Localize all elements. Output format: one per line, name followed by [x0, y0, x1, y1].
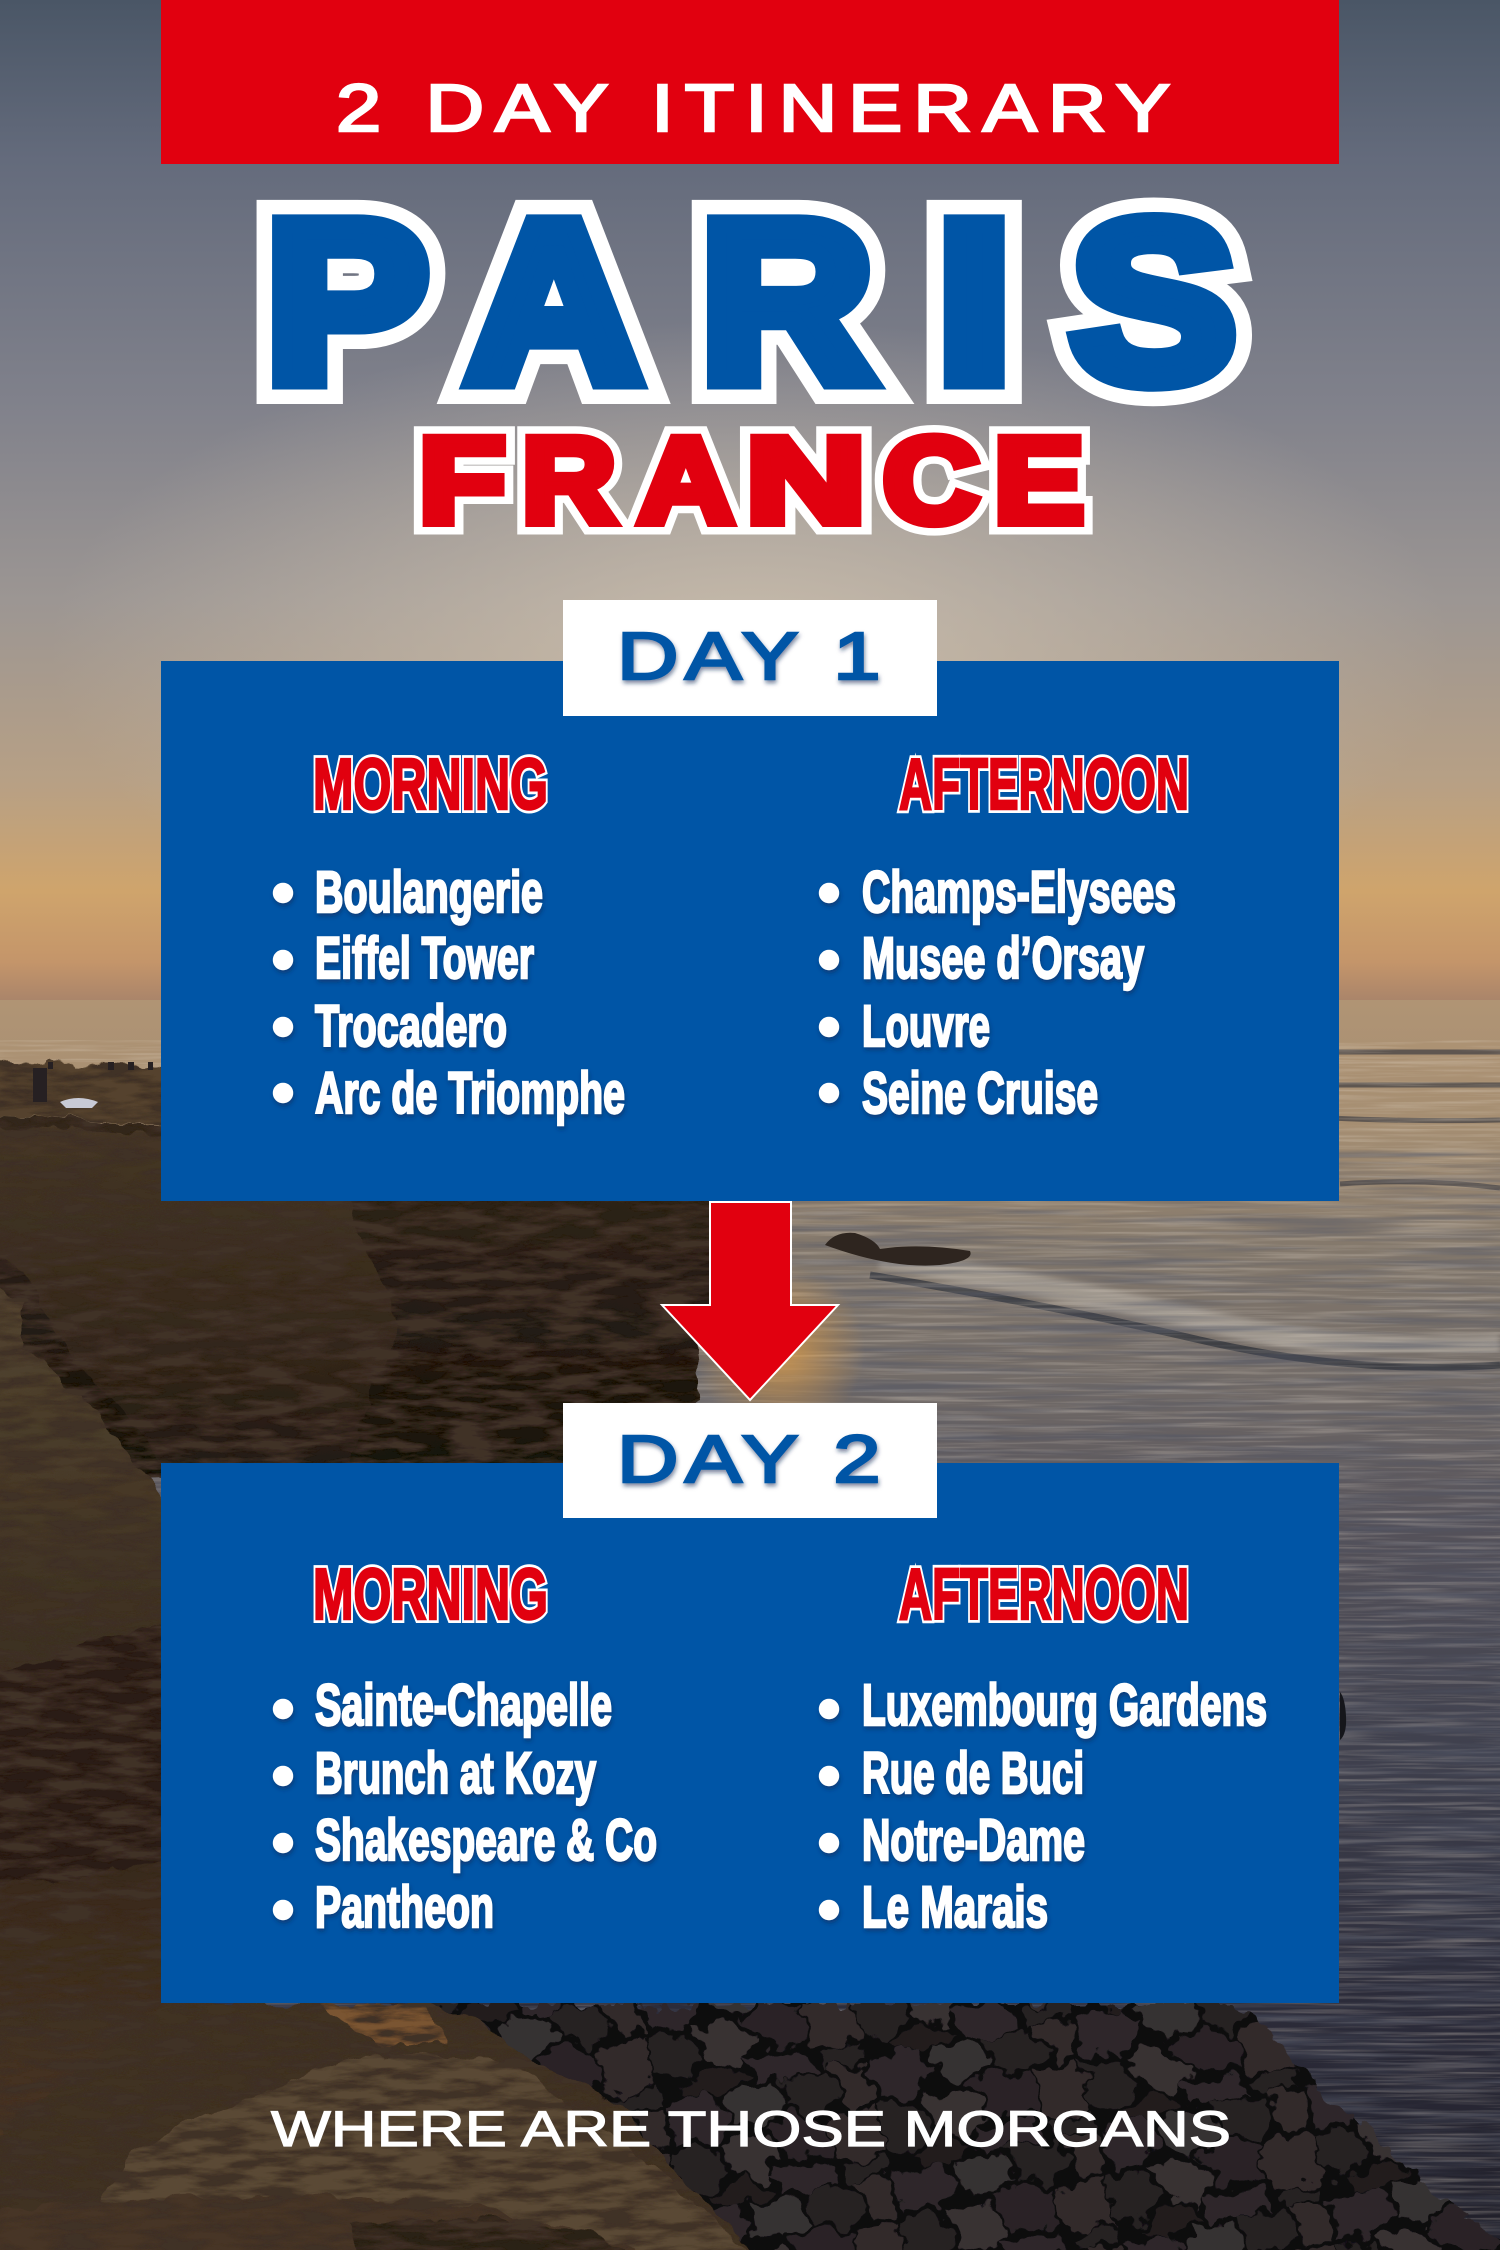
- subtitle: FRANCE: C: [883, 413, 979, 548]
- subtitle: FRANCE: E: [994, 413, 1084, 548]
- day 2 afternoon list: Notre-Dame: [862, 1808, 1085, 1873]
- title: PARIS: I: [937, 174, 1011, 428]
- day 1 tab: [563, 600, 937, 716]
- title: PARIS: P: [266, 174, 428, 428]
- cliffs: [0, 1063, 770, 2250]
- day 2 tab: DAY 2: [617, 1422, 887, 1497]
- title: PARIS: R: [701, 175, 873, 429]
- day 2 morning heading: MORNING: [313, 1555, 548, 1635]
- subtitle: FRANCE: [419, 412, 1084, 548]
- day 1 afternoon heading: [899, 745, 1189, 825]
- day 1 morning list: Eiffel Tower: [315, 926, 534, 991]
- subtitle: FRANCE: F: [419, 413, 505, 548]
- day 2 morning list: Sainte-Chapelle: [315, 1673, 612, 1738]
- subtitle: FRANCE: N: [746, 413, 866, 548]
- day 1 afternoon heading: AFTERNOON: [899, 745, 1189, 825]
- pebbles: [380, 2003, 1500, 2250]
- day 2 afternoon list: [820, 1673, 1267, 1940]
- top banner: [161, 0, 1339, 164]
- day 2 morning heading: [313, 1555, 548, 1635]
- day 2 morning list: [274, 1673, 657, 1940]
- subtitle: FRANCE: A: [638, 412, 734, 548]
- day 1 morning list: Trocadero: [315, 994, 507, 1059]
- day 1 morning heading: MORNING: [313, 745, 548, 825]
- title: PARIS: S: [1071, 175, 1236, 429]
- day 1 afternoon list: [820, 860, 1176, 1126]
- subtitle: FRANCE: N: [746, 413, 866, 548]
- day 2 afternoon list: Rue de Buci: [862, 1741, 1084, 1806]
- day 2 afternoon heading: AFTERNOON: [899, 1555, 1189, 1635]
- day 2 morning list: Shakespeare & Co: [315, 1808, 657, 1873]
- day 2 morning list: Pantheon: [315, 1875, 494, 1940]
- day 1 afternoon list: Champs-Elysees: [862, 860, 1176, 925]
- day 1 morning list: [274, 860, 625, 1126]
- title: PARIS: R: [701, 175, 873, 429]
- title: PARIS: P: [266, 174, 428, 428]
- day 2 morning heading: MORNING: [313, 1555, 548, 1635]
- day 1 morning list: Boulangerie: [315, 860, 543, 925]
- title: PARIS: A: [467, 174, 641, 429]
- day 1 tab: DAY 1: [617, 619, 887, 694]
- day 2 afternoon heading: [899, 1555, 1189, 1635]
- day 1 morning list: Arc de Triomphe: [315, 1061, 625, 1126]
- day 2 tab: [563, 1403, 937, 1518]
- subtitle: FRANCE: E: [994, 413, 1084, 548]
- day 2 afternoon heading: AFTERNOON: [899, 1555, 1189, 1635]
- subtitle: FRANCE: R: [522, 412, 616, 548]
- subtitle: FRANCE: R: [522, 412, 616, 548]
- title: PARIS: [266, 174, 1236, 429]
- day 1 morning heading: [313, 745, 548, 825]
- banner title: 2 DAY ITINERARY: [336, 71, 1181, 146]
- day 2 morning list: Brunch at Kozy: [315, 1741, 596, 1806]
- day 1 morning heading: MORNING: [313, 745, 548, 825]
- day 2 afternoon list: Le Marais: [862, 1875, 1048, 1940]
- panel: day 1: [161, 600, 1339, 1201]
- day 1 afternoon heading: AFTERNOON: [899, 745, 1189, 825]
- day 1 afternoon list: Louvre: [862, 994, 990, 1059]
- subtitle: FRANCE: C: [883, 413, 979, 548]
- title: PARIS: A: [467, 174, 641, 429]
- footer credit: WHERE ARE THOSE MORGANS: [271, 2101, 1231, 2157]
- subtitle: FRANCE: A: [638, 412, 734, 548]
- subtitle: FRANCE: F: [419, 413, 505, 548]
- beach people silhouettes: [33, 1062, 153, 1102]
- title: PARIS: I: [937, 174, 1011, 428]
- day 1 afternoon list: Musee d’Orsay: [862, 926, 1144, 991]
- title: PARIS: S: [1071, 175, 1236, 429]
- panel: day 2: [161, 1403, 1339, 2003]
- arrow: day 1 to day 2: [662, 1202, 838, 1400]
- day 1 afternoon list: Seine Cruise: [862, 1061, 1098, 1126]
- day 2 afternoon list: Luxembourg Gardens: [862, 1673, 1267, 1738]
